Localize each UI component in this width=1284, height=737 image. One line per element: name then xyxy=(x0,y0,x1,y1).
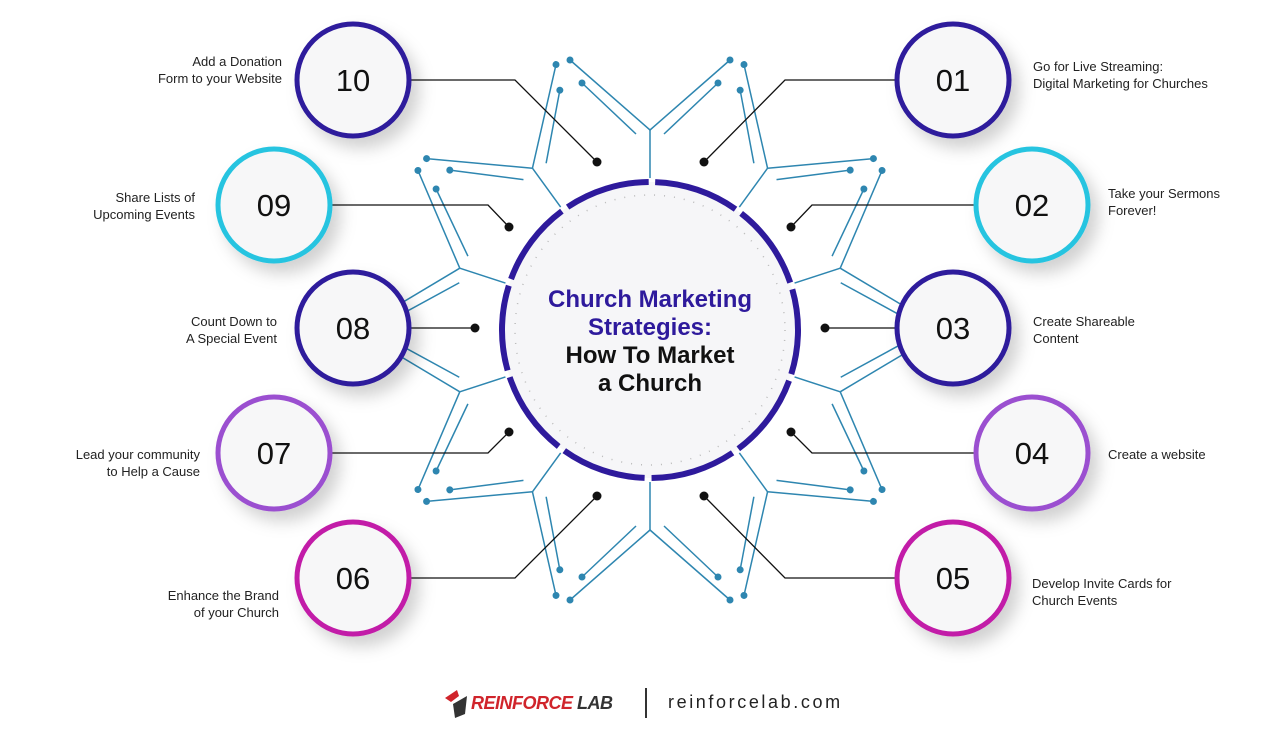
label 01 xyxy=(1033,59,1208,91)
label 08: Count Down to xyxy=(191,314,277,329)
numbered circles: 08 xyxy=(336,311,370,346)
icon: logo mark xyxy=(445,690,467,718)
circuit decoration xyxy=(364,56,936,604)
label 02: Forever! xyxy=(1108,203,1156,218)
label 04: Create a website xyxy=(1108,447,1206,462)
divider xyxy=(645,688,646,718)
label 10: Form to your Website xyxy=(158,71,282,86)
label 05 xyxy=(1032,576,1172,608)
numbered circles: 01 xyxy=(936,63,970,98)
label 02 xyxy=(1108,186,1220,218)
label 09: Share Lists of xyxy=(116,190,195,205)
numbered circles: 02 xyxy=(1015,188,1049,223)
website: reinforcelab.com xyxy=(668,692,843,712)
label 05: Develop Invite Cards for xyxy=(1032,576,1171,591)
connectors xyxy=(331,80,975,578)
central circle xyxy=(497,177,803,483)
label 02: Take your Sermons xyxy=(1108,186,1220,201)
label 03: Content xyxy=(1033,331,1079,346)
title: Strategies: xyxy=(588,314,712,341)
title: How To Market xyxy=(566,342,734,369)
label 07: to Help a Cause xyxy=(107,464,200,479)
title xyxy=(548,286,752,397)
label 01: Go for Live Streaming: xyxy=(1033,59,1163,74)
numbered circles: 07 xyxy=(257,436,291,471)
footer logo: REINFORCE LAB xyxy=(471,693,613,713)
numbered circles: 03 xyxy=(936,311,970,346)
title: Church Marketing xyxy=(548,286,752,313)
numbered circles xyxy=(218,24,1088,634)
label 10 xyxy=(158,54,282,86)
label 08 xyxy=(186,314,277,346)
label 05: Church Events xyxy=(1032,593,1117,608)
label 06: Enhance the Brand xyxy=(168,588,279,603)
label 09: Upcoming Events xyxy=(93,207,195,222)
label 06: of your Church xyxy=(194,605,279,620)
label 09 xyxy=(93,190,195,222)
numbered circles: 09 xyxy=(257,188,291,223)
label 06 xyxy=(168,588,279,620)
title: a Church xyxy=(598,370,702,397)
label 03: Create Shareable xyxy=(1033,314,1135,329)
numbered circles: 04 xyxy=(1015,436,1049,471)
numbered circles: 06 xyxy=(336,561,370,596)
label 07 xyxy=(76,447,200,479)
label 10: Add a Donation xyxy=(192,54,282,69)
label 01: Digital Marketing for Churches xyxy=(1033,76,1208,91)
footer logo xyxy=(445,690,613,718)
label 08: A Special Event xyxy=(186,331,277,346)
label 03 xyxy=(1033,314,1135,346)
label 07: Lead your community xyxy=(76,447,200,462)
numbered circles: 10 xyxy=(336,63,370,98)
numbered circles: 05 xyxy=(936,561,970,596)
